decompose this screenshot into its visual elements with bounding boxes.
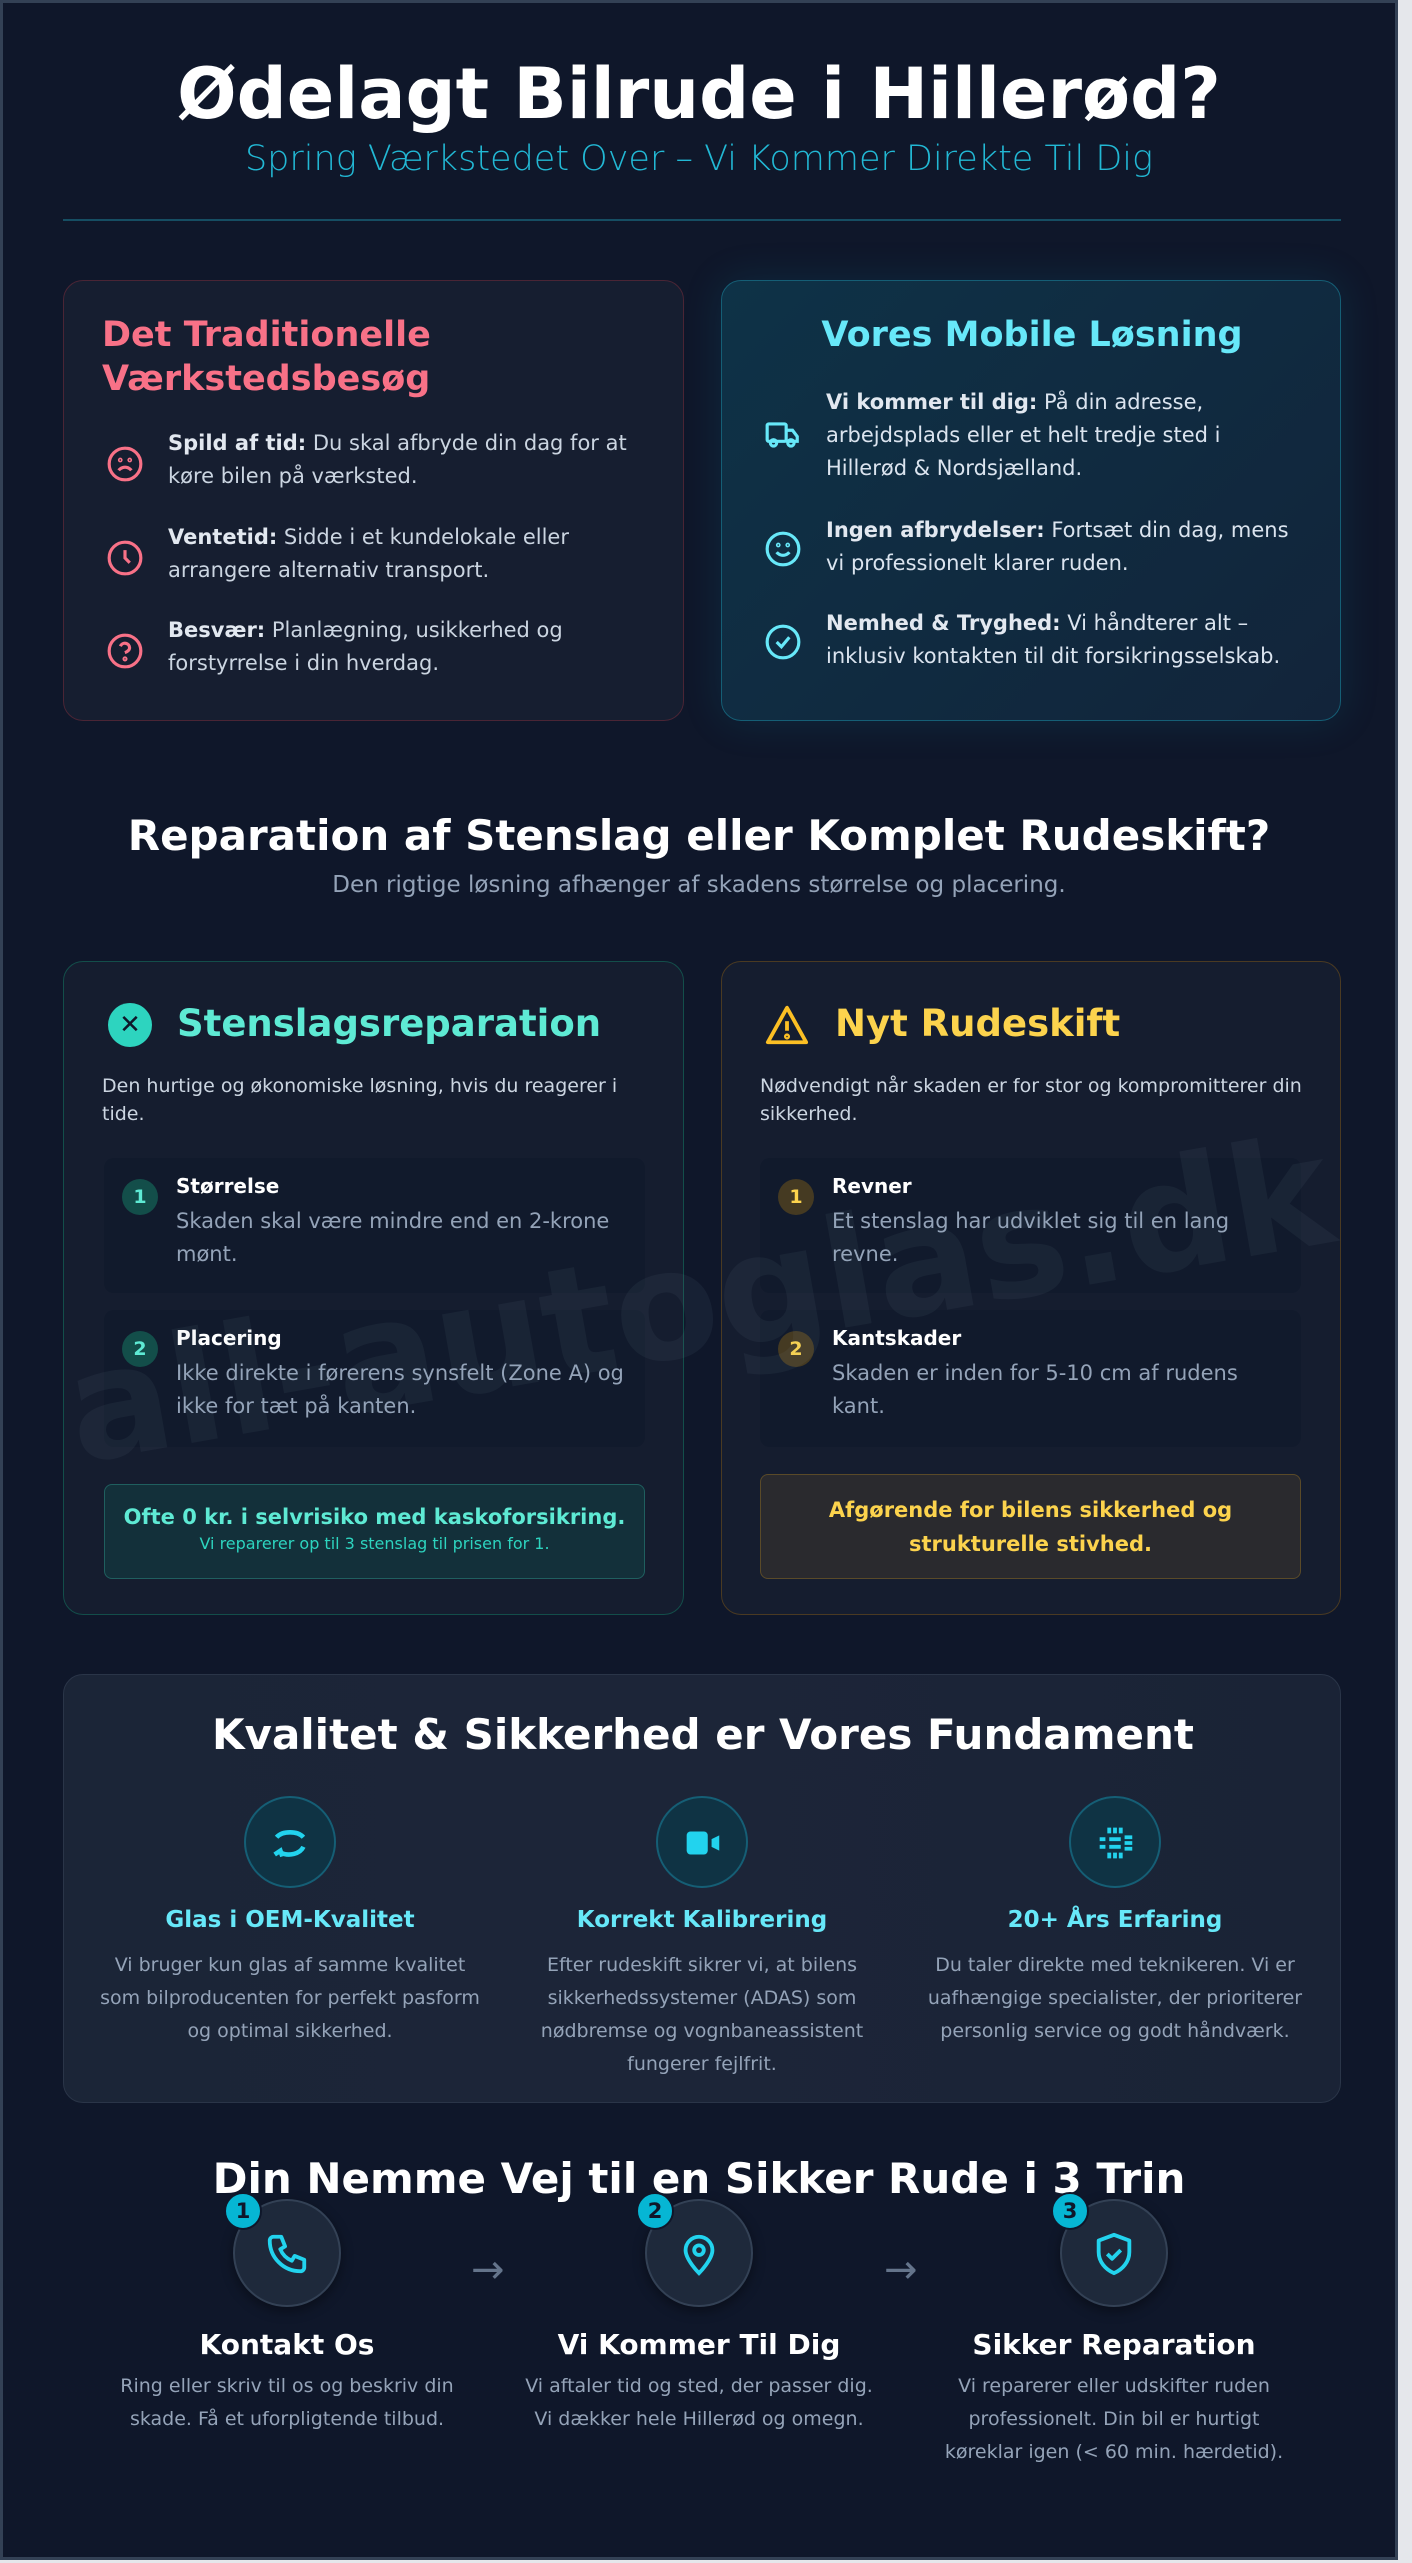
item: kantskader — [760, 1310, 1301, 1447]
item: placering — [104, 1310, 645, 1447]
item: revner: 1 — [789, 1186, 803, 1208]
card: stenslagsreparation — [63, 961, 684, 1615]
badge 3 — [1051, 2192, 1089, 2230]
watermark: all-autoglas.dk — [54, 1101, 1347, 1498]
feature: OEM — [100, 1796, 480, 2042]
item: nemhed: Nemhed & Tryghed: Vi håndterer alt – inklusiv kontakten til dit forsikringsselskab. — [826, 611, 1280, 668]
panel: kvalitet — [63, 1674, 1341, 2103]
heading: traditional — [102, 315, 431, 399]
heading: nyt rudeskift: Nyt Rudeskift — [835, 1002, 1120, 1045]
callout: selvrisiko: Ofte 0 kr. i selvrisiko med kaskoforsikring. — [124, 1505, 625, 1529]
item: størrelse — [104, 1158, 645, 1293]
step 3 — [945, 2192, 1283, 2463]
callout: selvrisiko — [104, 1484, 645, 1579]
step 1: Ring eller skriv til os og beskriv din — [120, 2375, 454, 2397]
item: kantskader: Kantskader — [832, 1326, 961, 1350]
feature: OEM: Glas i OEM-Kvalitet — [165, 1907, 415, 1933]
icon: warning — [766, 1006, 808, 1044]
feature: erfaring: personlig service og godt håndværk. — [940, 2020, 1290, 2042]
item: størrelse: 1 — [133, 1186, 147, 1208]
section heading: reparation: Reparation af Stenslag eller Komplet Rudeskift? — [128, 811, 1270, 860]
feature: erfaring: 20+ Års Erfaring — [1008, 1907, 1222, 1933]
step 2: Vi Kommer Til Dig — [558, 2328, 840, 2361]
panel: traditional — [63, 280, 684, 721]
feature: OEM: som bilproducenten for perfekt pasform — [100, 1987, 480, 2009]
feature: kalibrering: fungerer fejlfrit. — [627, 2053, 777, 2075]
step 3: køreklar igen (< 60 min. hærdetid). — [945, 2441, 1283, 2463]
item: størrelse: Skaden skal være mindre end en 2-krone mønt. — [176, 1209, 609, 1266]
card: nyt rudeskift — [721, 961, 1341, 1615]
heading: mobile: Vores Mobile Løsning — [821, 315, 1243, 355]
item: revner — [760, 1158, 1301, 1293]
badge 1: 1 — [236, 2199, 250, 2223]
step 2 — [525, 2194, 873, 2430]
step 3: professionelt. Din bil er hurtigt — [968, 2408, 1260, 2430]
feature: OEM: Vi bruger kun glas af samme kvalitet — [115, 1954, 465, 1976]
feature: kalibrering: sikkerhedssystemer (ADAS) som — [548, 1987, 856, 2009]
title: Ødelagt Bilrude i Hillerød? — [177, 53, 1221, 135]
item: størrelse: Størrelse — [176, 1174, 279, 1198]
feature: erfaring — [928, 1796, 1302, 2042]
badge 2: 2 — [648, 2199, 662, 2223]
icon: x circle — [108, 1003, 152, 1047]
item: spild af tid: Spild af tid: Du skal afbryde din dag for at køre bilen på værksted. — [168, 431, 627, 488]
item: kantskader: Skaden er inden for 5-10 cm af rudens kant. — [832, 1361, 1238, 1418]
heading: traditional: Det Traditionelle — [102, 315, 431, 355]
panel: mobile — [721, 280, 1341, 721]
step 3: Vi reparerer eller udskifter ruden — [958, 2375, 1270, 2397]
subtitle: Spring Værkstedet Over – Vi Kommer Direkte Til Dig — [245, 139, 1153, 179]
item: vi kommer: Vi kommer til dig: På din adresse, arbejdsplads eller et helt tredje sted i Hillerød & Nordsjælland. — [826, 390, 1220, 480]
step 1: Kontakt Os — [200, 2328, 374, 2361]
feature: kalibrering — [541, 1796, 863, 2075]
item: ventetid: Ventetid: Sidde i et kundelokale eller arrangere alternativ transport. — [168, 525, 569, 582]
step 3: Sikker Reparation — [972, 2328, 1256, 2361]
callout: selvrisiko: Vi reparerer op til 3 stenslag til prisen for 1. — [199, 1534, 550, 1553]
feature: OEM: og optimal sikkerhed. — [187, 2020, 393, 2042]
heading: traditional: Værkstedsbesøg — [102, 359, 430, 399]
feature: kalibrering: Korrekt Kalibrering — [577, 1907, 827, 1933]
section subheading: Den rigtige løsning afhænger af skadens størrelse og placering. — [332, 872, 1066, 898]
item: placering: Placering — [176, 1326, 282, 1350]
icon: x circle: ✕ — [119, 1010, 141, 1040]
heading: stenslagsreparation: Stenslagsreparation — [177, 1002, 601, 1045]
step 2: Vi dækker hele Hillerød og omegn. — [534, 2408, 864, 2430]
heading: kvalitet: Kvalitet & Sikkerhed er Vores Fundament — [212, 1710, 1194, 1759]
arrow 1: → — [471, 2247, 505, 2293]
feature: erfaring: uafhængige specialister, der prioriterer — [928, 1987, 1302, 2009]
arrow 2: → — [884, 2247, 918, 2293]
item: ingen afbrydelser: Ingen afbrydelser: Fortsæt din dag, mens vi professionelt klarer ruden. — [826, 518, 1289, 575]
callout: sikkerhed: Afgørende for bilens sikkerhed og — [829, 1498, 1232, 1522]
step 1: skade. Få et uforpligtende tilbud. — [130, 2408, 444, 2430]
item: besvaer: Besvær: Planlægning, usikkerhed og forstyrrelse i din hverdag. — [168, 618, 563, 675]
callout: sikkerhed — [760, 1474, 1301, 1579]
feature: kalibrering: Efter rudeskift sikrer vi, at bilens — [547, 1954, 857, 1976]
item: kantskader: 2 — [789, 1338, 803, 1360]
badge 3: 3 — [1063, 2199, 1077, 2223]
feature: kalibrering: nødbremse og vognbaneassistent — [541, 2020, 863, 2042]
step 2: Vi aftaler tid og sted, der passer dig. — [525, 2375, 873, 2397]
section heading: 3 trin: Din Nemme Vej til en Sikker Rude i 3 Trin — [213, 2154, 1185, 2203]
step 1 — [120, 2194, 454, 2430]
item: placering: Ikke direkte i førerens synsfelt (Zone A) og ikke for tæt på kanten. — [176, 1361, 624, 1418]
item: revner: Et stenslag har udviklet sig til en lang revne. — [832, 1209, 1229, 1266]
item: revner: Revner — [832, 1174, 912, 1198]
feature: erfaring: Du taler direkte med teknikeren. Vi er — [935, 1954, 1295, 1976]
item: placering: 2 — [133, 1338, 147, 1360]
badge 1 — [224, 2192, 262, 2230]
callout: sikkerhed: strukturelle stivhed. — [909, 1532, 1152, 1556]
desc: Den hurtige og økonomiske løsning, hvis du reagerer i tide. — [102, 1075, 617, 1125]
badge 2 — [636, 2192, 674, 2230]
desc: Nødvendigt når skaden er for stor og kompromitterer din sikkerhed. — [760, 1075, 1302, 1125]
